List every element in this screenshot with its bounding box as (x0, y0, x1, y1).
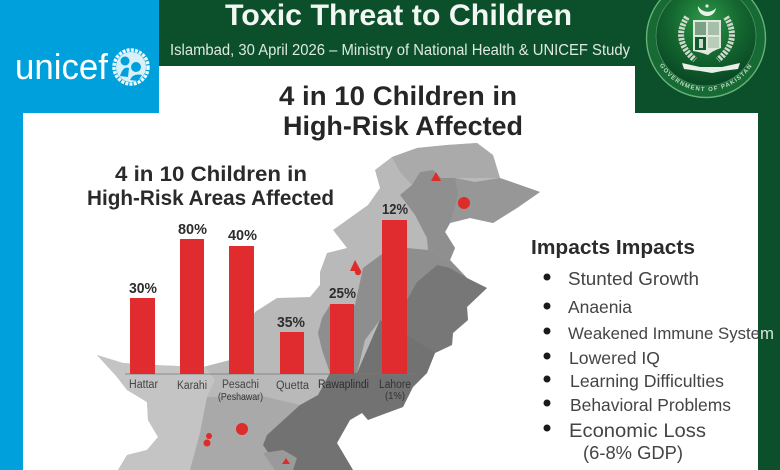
government of pakistan seal (646, 0, 766, 98)
bar: Karahi: 80% (178, 222, 207, 238)
main heading: 4 in 10 Children in (279, 81, 517, 111)
main heading (279, 81, 523, 141)
bar: Hattar: Hattar (129, 379, 158, 391)
map marker: mid dot (355, 269, 361, 275)
impacts list: Weakened Immune System (568, 324, 774, 343)
bar: Hattar (129, 281, 158, 391)
bar: Pesachi (218, 228, 263, 403)
bar: Karahi (177, 222, 207, 392)
axis (125, 373, 416, 375)
bar: Quetta: Quetta (276, 380, 310, 392)
impacts list: Economic Loss (569, 420, 706, 442)
map region: north (392, 143, 500, 185)
icon: wreath (681, 17, 732, 60)
bar: Lahore: Lahore (379, 379, 411, 391)
icon: scroll (682, 63, 740, 73)
bar: Lahore: (1%) (385, 391, 405, 402)
impacts list: Anaenia (568, 297, 632, 317)
impacts list: Learning Difficulties (570, 371, 724, 391)
map marker: north circle (458, 197, 470, 209)
map region: south notch (263, 450, 297, 470)
map marker: mid triangle (350, 260, 361, 271)
bar: Rawapindi: 25% (329, 286, 356, 302)
chart heading (87, 163, 334, 210)
bar: Quetta: 35% (277, 315, 305, 331)
chart heading: High-Risk Areas Affected (87, 187, 334, 210)
bar: Hattar: 30% (129, 281, 157, 297)
map region: south-east (407, 265, 487, 353)
impacts list: Stunted Growth (568, 269, 699, 289)
impacts list (544, 269, 774, 463)
map marker: north triangle (431, 172, 441, 181)
bar: Rawapindi: Rawaplindi (318, 379, 369, 391)
impacts list: Lowered IQ (569, 348, 660, 368)
bar: Karahi: Karahi (177, 380, 207, 392)
impacts list: Behavioral Problems (570, 395, 731, 415)
map of Pakistan (97, 143, 540, 470)
map region: north-east (430, 178, 540, 260)
bar: Pesachi: (Peshawar) (218, 391, 263, 403)
impacts list: (6-8% GDP) (583, 442, 683, 463)
icon: unicef emblem (114, 50, 148, 84)
impacts heading: Impacts Impacts (531, 236, 695, 259)
chart heading: 4 in 10 Children in (115, 163, 307, 186)
map marker: south small dots (204, 433, 212, 446)
subtitle: Islambad, 30 April 2026 – Ministry of National Health & UNICEF Study (170, 42, 630, 59)
impacts panel (531, 236, 774, 463)
bar: Rawapindi (318, 286, 369, 391)
map region: central south (190, 396, 300, 470)
map base (97, 143, 540, 470)
icon: shield (693, 20, 721, 55)
map region: south (263, 320, 435, 470)
bar: Pesachi: 40% (228, 228, 257, 244)
bar: Pesachi: Pesachi (222, 379, 259, 391)
bar chart (125, 202, 416, 403)
bar: Lahore: 12% (382, 202, 408, 218)
unicef logo: unicef (15, 46, 109, 87)
icon: crescent and star (698, 4, 716, 16)
map marker: south circle (236, 423, 248, 435)
bar: Lahore (379, 202, 411, 402)
panel: green header frame (159, 0, 780, 470)
map region: middle (318, 248, 467, 373)
panel: blue unicef frame (0, 0, 159, 470)
main heading: High-Risk Affected (283, 111, 523, 141)
seal ring text: GOVERNMENT OF PAKISTAN (660, 64, 752, 91)
map marker: south triangle (282, 458, 290, 464)
map region: north centre (400, 170, 458, 260)
map region: west (97, 355, 215, 470)
bar: Quetta (276, 315, 310, 392)
